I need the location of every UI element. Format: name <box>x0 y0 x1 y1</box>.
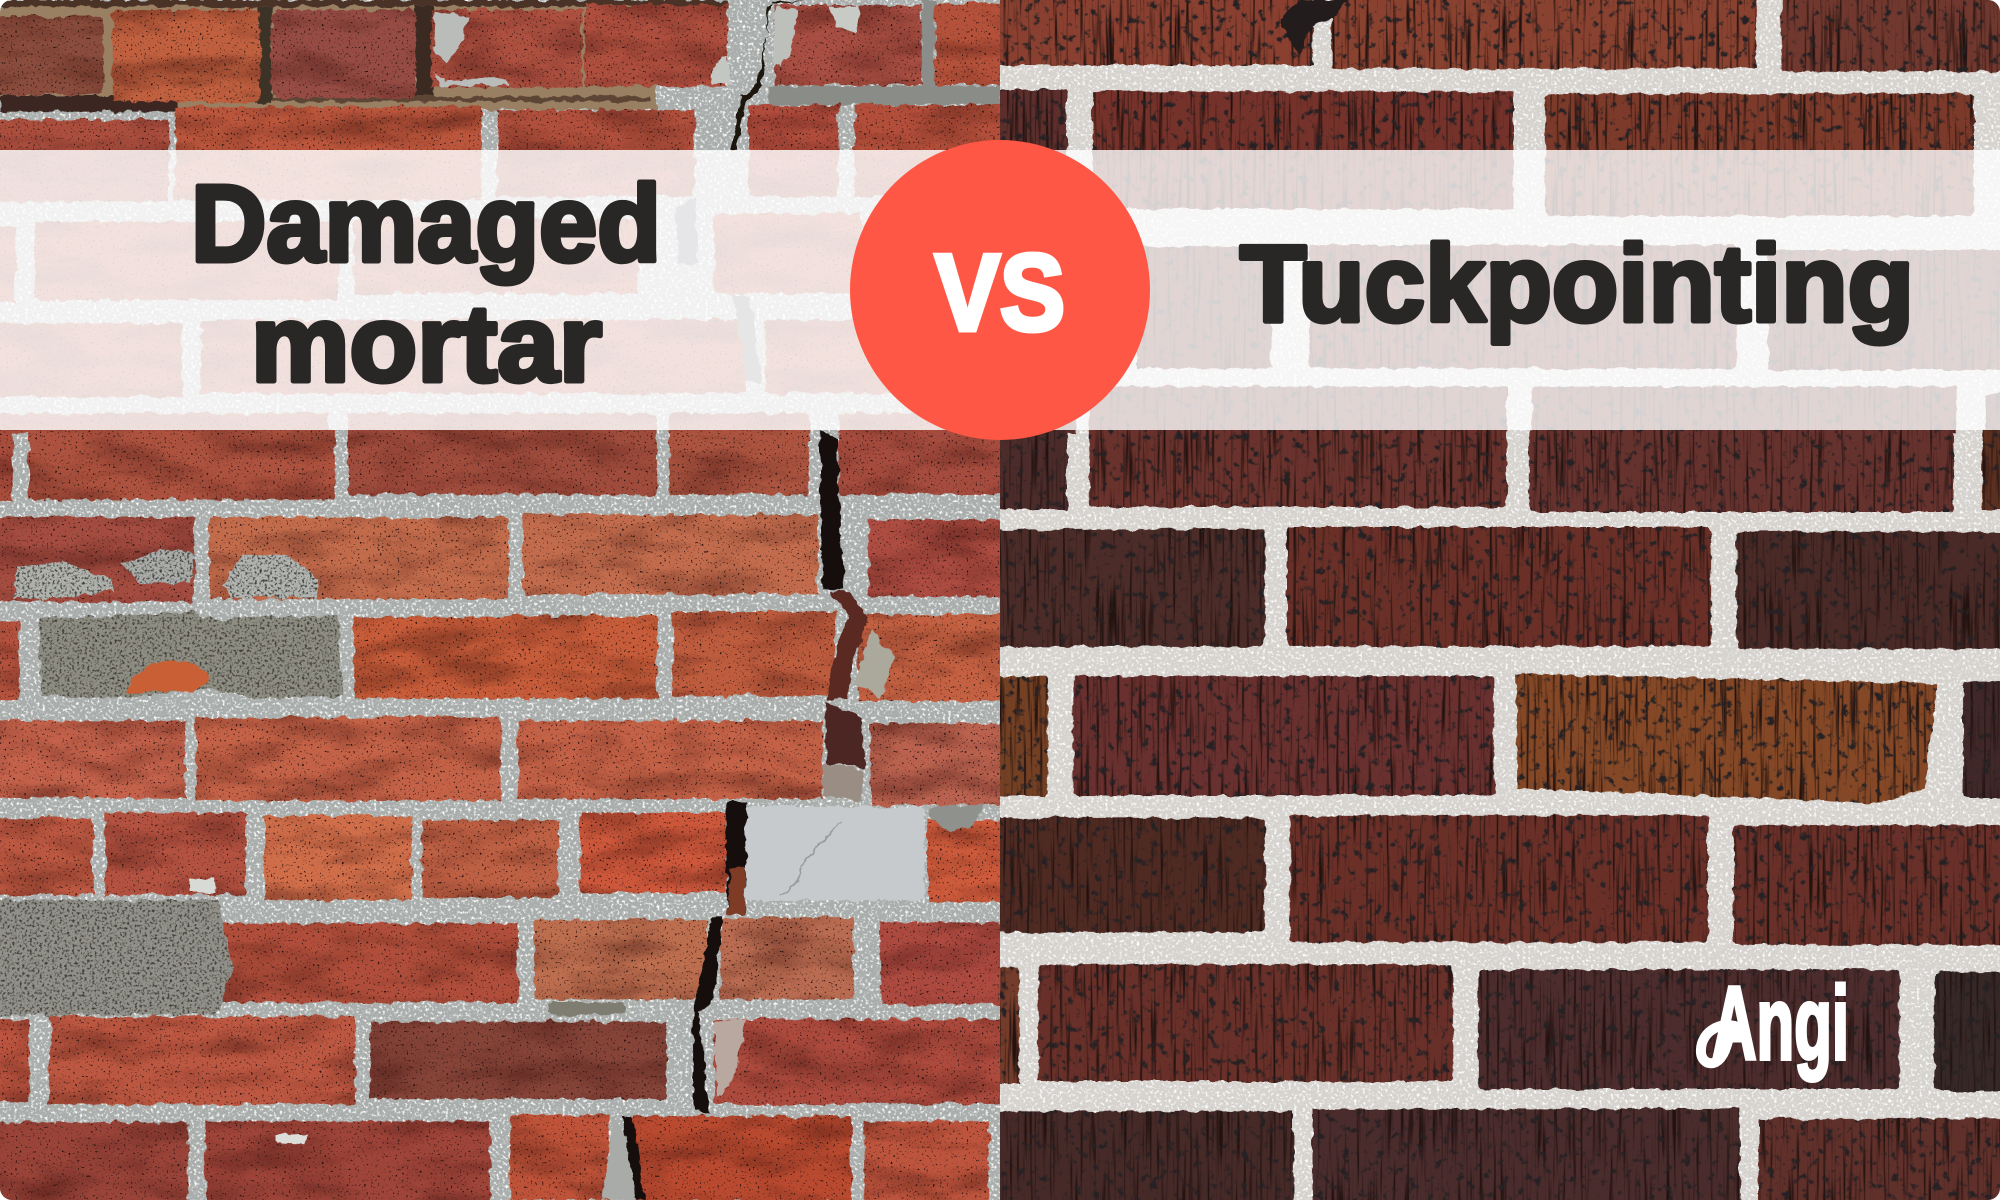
pale brick and chipped details <box>124 629 982 1200</box>
logo: Angi wordmark <box>1701 966 1849 1082</box>
heading: Damaged mortar: mortar <box>251 283 602 405</box>
badge: VS circle <box>850 140 1150 440</box>
lower section of damaged wall <box>0 430 1006 1200</box>
upper section of damaged wall <box>0 0 1008 433</box>
patched concrete <box>0 549 341 1014</box>
heading: Damaged mortar <box>191 163 661 405</box>
banner: translucent right title band <box>1000 150 2000 430</box>
logo: Angi wordmark: Angi <box>1712 966 1849 1082</box>
photo: tuckpointed brick wall with clean mortar <box>994 0 2000 1200</box>
brick rows seen through the left banner <box>0 227 16 302</box>
cracks through the wall <box>622 430 869 1200</box>
lower section of tuckpointed wall <box>994 430 2000 1200</box>
badge: VS circle: VS <box>935 232 1065 354</box>
heading: Tuckpointing: Tuckpointing <box>1240 223 1914 345</box>
dark soot mark on top brick <box>1281 0 1348 55</box>
heading: Damaged mortar: Damaged <box>191 163 661 285</box>
upper section of tuckpointed wall <box>994 0 2000 433</box>
photo: damaged brick wall with cracked mortar <box>0 0 1008 1200</box>
banner: translucent left title band <box>0 150 1000 430</box>
